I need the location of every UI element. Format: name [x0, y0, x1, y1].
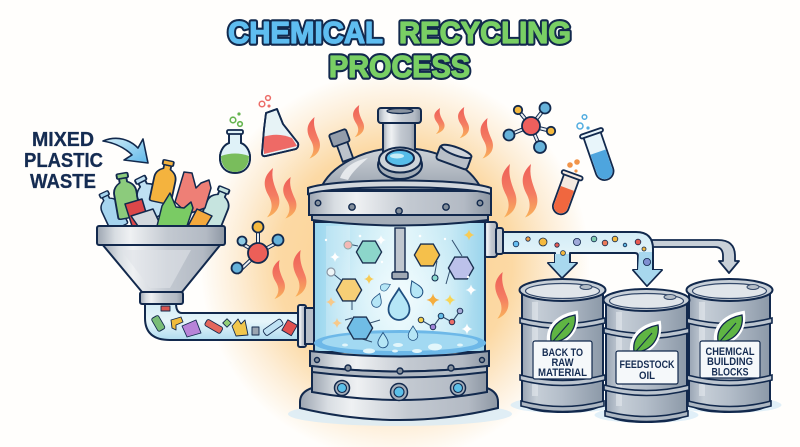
glass chamber — [314, 222, 485, 352]
title fill: PROCESS — [329, 49, 470, 84]
flames — [265, 105, 537, 319]
title outline: RECYCLING — [399, 15, 571, 50]
molecules in pipe — [513, 236, 651, 266]
lower flange and base — [300, 351, 498, 420]
orange can — [188, 209, 212, 226]
icon: molecule right — [504, 102, 555, 153]
green bag — [157, 193, 193, 226]
title fill: CHEMICAL — [228, 15, 383, 50]
title outline — [228, 15, 571, 84]
blue bottle left — [95, 189, 128, 231]
barrel: back to raw material: BACK TO — [542, 347, 583, 359]
pipe: funnel to reactor — [145, 303, 300, 340]
label: mixed plastic waste — [24, 129, 103, 193]
title fill — [228, 15, 571, 84]
barrel: feedstock oil: OIL — [639, 370, 655, 382]
icon: red conical flask — [259, 96, 298, 156]
barrel: feedstock oil: FEEDSTOCK — [620, 359, 675, 371]
silver carton — [131, 209, 161, 226]
label: mixed plastic waste: PLASTIC — [24, 150, 103, 172]
barrel: back to raw material — [510, 279, 614, 413]
dome lid — [320, 148, 482, 190]
sight glass — [378, 148, 422, 179]
upper flange with bolts — [308, 180, 491, 226]
red can — [125, 199, 150, 226]
title outline: PROCESS — [329, 49, 470, 84]
top nozzle — [378, 108, 421, 156]
barrel: chemical building blocks: BLOCKS — [712, 366, 748, 378]
funnel — [97, 226, 225, 304]
barrel: back to raw material: RAW — [552, 357, 574, 369]
side port right — [436, 142, 473, 170]
barrel: chemical building blocks — [678, 279, 782, 413]
arrow: waste into funnel — [103, 138, 148, 163]
pale bottle right — [198, 184, 235, 232]
orange bottle — [149, 158, 179, 205]
side valve left — [329, 129, 356, 163]
panel: plastic pile in funnel — [95, 158, 235, 232]
title — [228, 15, 571, 84]
barrel: chemical building blocks: BUILDING — [707, 356, 753, 368]
icon: green round flask — [220, 113, 250, 173]
pipe contents: plastic bits — [151, 306, 297, 337]
body — [312, 372, 487, 400]
bubbles: test tubes — [567, 115, 590, 173]
label: mixed plastic waste: MIXED — [32, 129, 94, 151]
sparkles — [325, 230, 476, 334]
base shadow — [288, 402, 512, 426]
title outline: CHEMICAL — [228, 15, 383, 50]
blue bottle middle — [130, 173, 169, 221]
icon: blue test tube — [580, 127, 619, 183]
title fill: RECYCLING — [399, 15, 571, 50]
barrel: chemical building blocks: CHEMICAL — [706, 346, 755, 358]
main glass pipe with two arrows — [496, 232, 662, 286]
pink bag — [175, 172, 211, 214]
barrel: back to raw material: MATERIAL — [538, 367, 587, 379]
liquid pool — [314, 330, 486, 356]
stirrer shaft — [392, 228, 408, 279]
foot — [300, 388, 498, 420]
barrel: feedstock oil — [594, 289, 698, 423]
pipe flange left — [298, 305, 315, 347]
icon: molecule left — [232, 222, 284, 274]
molecules in chamber — [327, 240, 474, 342]
arrow shading — [549, 252, 661, 285]
green bottle — [111, 171, 141, 220]
flange right — [484, 222, 503, 257]
grey pipe to third barrel — [640, 240, 739, 273]
output pipe system — [496, 232, 739, 286]
icon: orange test tube — [548, 170, 583, 218]
reactor vessel — [288, 108, 512, 426]
label: mixed plastic waste: WASTE — [30, 171, 96, 193]
droplets — [370, 278, 425, 348]
